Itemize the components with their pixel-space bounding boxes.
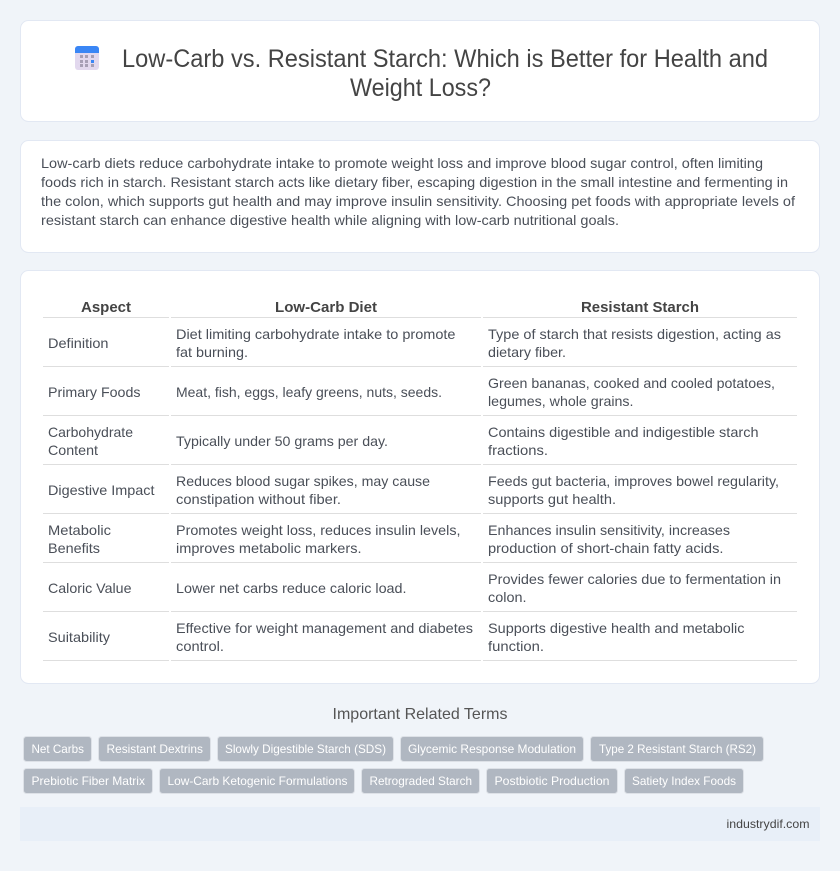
related term tags: Net Carbs bbox=[32, 742, 84, 756]
row: suitability bbox=[48, 620, 744, 654]
row: digestive impact: constipation without fiber. bbox=[176, 491, 341, 507]
row: caloric value: Caloric Value bbox=[48, 580, 132, 596]
row: metabolic benefits: Metabolic bbox=[48, 522, 111, 538]
row: metabolic benefits: Enhances insulin sensitivity, increases bbox=[488, 522, 730, 538]
row: carbohydrate content: fractions. bbox=[488, 442, 548, 458]
row: carbohydrate content: Carbohydrate bbox=[48, 424, 133, 440]
row: digestive impact: supports gut health. bbox=[488, 491, 616, 507]
title: Low-Carb vs. Resistant Starch: Which is Better for Health and bbox=[122, 45, 768, 73]
row: definition: Definition bbox=[48, 335, 108, 351]
footer bbox=[20, 807, 820, 841]
table header row: Resistant Starch bbox=[581, 299, 699, 316]
row: digestive impact: Feeds gut bacteria, improves bowel regularity, bbox=[488, 473, 779, 489]
panel: introduction text: the colon, which supports gut health and may improve insulin sensitivity. Choosing pet foods with appropriate levels of bbox=[41, 193, 795, 209]
icon: calendar bbox=[75, 46, 99, 70]
row: suitability: Suitability bbox=[48, 629, 110, 645]
related term tags: Resistant Dextrins bbox=[106, 742, 203, 756]
row: carbohydrate content bbox=[48, 424, 758, 458]
row: digestive impact: Digestive Impact bbox=[48, 482, 155, 498]
panel: comparison table bbox=[20, 270, 820, 684]
row: suitability: Supports digestive health and metabolic bbox=[488, 620, 744, 636]
row: carbohydrate content: Contains digestible and indigestible starch bbox=[488, 424, 758, 440]
related term tags: Postbiotic Production bbox=[494, 774, 610, 788]
panel: introduction text: foods rich in starch. Resistant starch acts like dietary fiber, escaping digestion in the small intestine and fermenting in bbox=[41, 174, 788, 190]
related term tags: Retrograded Starch bbox=[370, 774, 472, 788]
row: metabolic benefits: Promotes weight loss, reduces insulin levels, bbox=[176, 522, 460, 538]
row: definition: fat burning. bbox=[176, 344, 248, 360]
title: Weight Loss? bbox=[350, 74, 491, 102]
related term tags bbox=[24, 736, 764, 794]
table header row: Aspect bbox=[81, 299, 131, 316]
row: metabolic benefits: Benefits bbox=[48, 540, 100, 556]
row: caloric value: Provides fewer calories due to fermentation in bbox=[488, 571, 781, 587]
panel: header card bbox=[20, 20, 820, 122]
row: primary foods: legumes, whole grains. bbox=[488, 393, 634, 409]
row: primary foods bbox=[48, 375, 775, 409]
related term tags: Prebiotic Fiber Matrix bbox=[32, 774, 145, 788]
row: primary foods: Primary Foods bbox=[48, 384, 140, 400]
row: definition: Diet limiting carbohydrate intake to promote bbox=[176, 326, 456, 342]
row: digestive impact: Reduces blood sugar spikes, may cause bbox=[176, 473, 430, 489]
related term tags: Glycemic Response Modulation bbox=[408, 742, 576, 756]
related term tags: Satiety Index Foods bbox=[632, 774, 736, 788]
row: suitability: function. bbox=[488, 638, 544, 654]
row: carbohydrate content: Content bbox=[48, 442, 98, 458]
related term tags: Type 2 Resistant Starch (RS2) bbox=[599, 742, 756, 756]
heading: important related terms: Important Related Terms bbox=[332, 706, 508, 723]
row: definition: dietary fiber. bbox=[488, 344, 566, 360]
table header row bbox=[81, 299, 699, 316]
row: metabolic benefits: improves metabolic markers. bbox=[176, 540, 362, 556]
row: digestive impact bbox=[48, 473, 779, 507]
row: definition: Type of starch that resists digestion, acting as bbox=[488, 326, 781, 342]
row: carbohydrate content: Typically under 50 grams per day. bbox=[176, 433, 388, 449]
row: suitability: Effective for weight management and diabetes bbox=[176, 620, 473, 636]
row: caloric value bbox=[48, 571, 781, 605]
row: metabolic benefits bbox=[48, 522, 730, 556]
row: caloric value: colon. bbox=[488, 589, 526, 605]
row: primary foods: Meat, fish, eggs, leafy greens, nuts, seeds. bbox=[176, 384, 442, 400]
row: definition bbox=[48, 326, 781, 360]
panel: introduction text: resistant starch can enhance digestive health while aligning with low-carb nutritional goals. bbox=[41, 212, 619, 228]
related term tags: Low-Carb Ketogenic Formulations bbox=[168, 774, 348, 788]
related term tags: Slowly Digestible Starch (SDS) bbox=[225, 742, 386, 756]
row: metabolic benefits: production of short-chain fatty acids. bbox=[488, 540, 724, 556]
title bbox=[122, 45, 768, 102]
row: primary foods: Green bananas, cooked and cooled potatoes, bbox=[488, 375, 775, 391]
panel: introduction text: Low-carb diets reduce carbohydrate intake to promote weight loss and improve blood sugar control, often limiting bbox=[41, 155, 763, 171]
table header row: Low-Carb Diet bbox=[275, 299, 377, 316]
row: suitability: control. bbox=[176, 638, 224, 654]
row: caloric value: Lower net carbs reduce caloric load. bbox=[176, 580, 406, 596]
panel: introduction text bbox=[20, 140, 820, 252]
footer: industrydif.com bbox=[726, 817, 810, 831]
